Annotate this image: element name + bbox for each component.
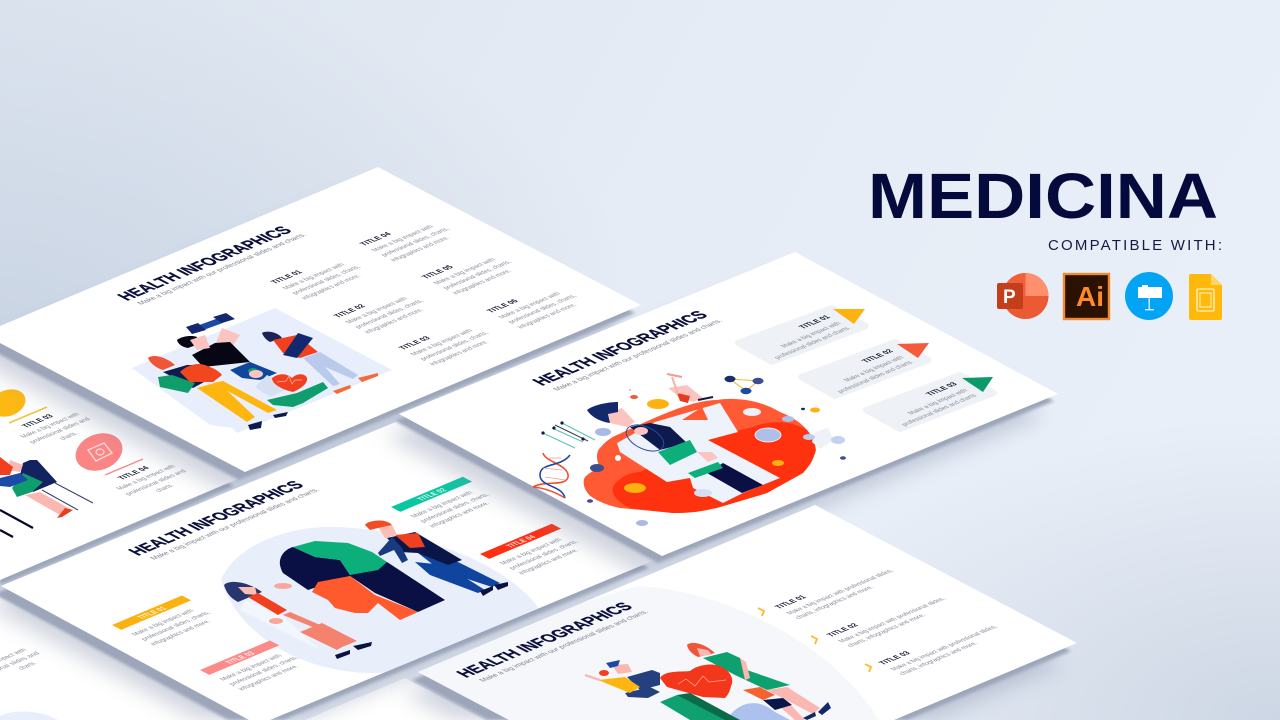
title 02 block <box>391 477 505 529</box>
title 02 block <box>331 287 435 335</box>
title 05 block <box>419 248 523 296</box>
title 03 block: professional slides, charts, <box>418 330 491 362</box>
subheading: Make a big impact with our professional slides and charts. <box>552 319 725 392</box>
icon: PowerPoint: P <box>1003 287 1016 308</box>
title 03 block: infographics and more. <box>237 664 301 692</box>
icon: chevron 01 <box>758 608 764 616</box>
title 02 block: TITLE 02 <box>331 303 368 319</box>
title 01 block: infographics and more. <box>300 273 363 301</box>
illustration: head puzzle <box>221 520 540 673</box>
title 01 block: professional slides, charts, <box>140 610 213 642</box>
title 04 block: Make a big impact with <box>115 464 178 491</box>
divider: yellow <box>9 407 47 423</box>
title 04 block <box>480 524 594 576</box>
title 03 block <box>6 405 103 450</box>
title 04 block: professional slides and <box>124 469 189 497</box>
callout 01: professional slides and charts. <box>773 326 853 360</box>
title 02 block: Make a big impact with <box>409 490 475 519</box>
panel: puzzle slide <box>0 421 655 720</box>
title 02 block: TITLE 02 <box>415 487 449 502</box>
title 01 block <box>112 596 224 647</box>
title 01 block: TITLE 01 <box>772 594 809 610</box>
panel: left slide <box>0 352 240 595</box>
subheading: Make a big impact with our professional slides and charts. <box>136 233 309 306</box>
title 04 block: Make a big impact with <box>498 537 564 566</box>
title 01 block: infographics and more. <box>149 619 213 647</box>
divider: pink <box>105 459 143 475</box>
compatible with label: COMPATIBLE WITH: <box>1048 237 1222 254</box>
title 04 block: TITLE 04 <box>504 533 539 549</box>
title 02 block: infographics and more. <box>428 501 492 529</box>
callout 03: TITLE 03 <box>923 381 960 397</box>
title 02 block: Make a big impact with <box>344 296 410 325</box>
icon: chevron 02 <box>811 636 817 644</box>
title 03 block: infographics and more. <box>428 339 491 367</box>
callout 01 <box>738 308 866 362</box>
icon: yellow circle <box>0 385 29 421</box>
icon: molecule <box>724 376 764 394</box>
title 03 block: professional slides, charts, <box>228 655 301 687</box>
title 03 block <box>396 319 500 367</box>
title 04 block <box>357 215 461 263</box>
title 01 block <box>268 253 372 301</box>
panel: family slide <box>400 505 1077 720</box>
icon: DNA helix <box>533 453 570 498</box>
title 03 block <box>200 641 312 692</box>
title 02 block: professional slides, charts, <box>353 298 426 330</box>
decorative circle <box>0 711 58 720</box>
callout 02: TITLE 02 <box>859 348 896 364</box>
title 01 block: TITLE 01 <box>268 269 305 285</box>
title 06 block: Make a big impact with <box>497 291 563 320</box>
icon: chevron 03 <box>865 664 871 672</box>
text block: bottom-left slide: charts. <box>17 661 39 671</box>
illustration: seated person <box>0 457 93 537</box>
panel: bottom-left slide <box>0 597 234 720</box>
title 01 block <box>772 562 905 620</box>
callout 02 <box>801 342 929 396</box>
icon: pink circle <box>70 427 128 477</box>
title 02 block: charts, infographics and more. <box>846 613 928 648</box>
title 03 block: TITLE 03 <box>19 413 56 429</box>
callout 02: professional slides and charts. <box>836 360 916 394</box>
subheading: Make a big impact with our professional slides and charts. <box>478 610 651 683</box>
title 05 block: professional slides, charts, <box>441 259 514 291</box>
title 05 block: infographics and more. <box>451 268 514 296</box>
title 03 block: TITLE 03 <box>876 650 913 666</box>
title 03 block: charts. <box>58 431 80 441</box>
title 01 block: Make a big impact with <box>130 608 196 637</box>
title 06 block: infographics and more. <box>516 302 579 330</box>
title 04 block: infographics and more. <box>389 235 452 263</box>
heading: HEALTH INFOGRAPHICS <box>452 600 638 680</box>
illustration: fitness group <box>132 308 392 433</box>
callout 02: Make a big impact with <box>842 355 906 383</box>
title 02 block: infographics and more. <box>363 307 426 335</box>
panel: top slide <box>0 167 641 494</box>
heading: HEALTH INFOGRAPHICS <box>124 479 309 558</box>
title 04 block: infographics and more. <box>517 548 581 576</box>
panel: bottom-centre slide <box>305 678 485 720</box>
icon: Illustrator <box>1064 274 1109 319</box>
title 04 block: TITLE 04 <box>357 230 394 247</box>
title 04 block: charts. <box>154 483 176 493</box>
title 04 block <box>102 457 199 502</box>
callout 01: Make a big impact with <box>779 321 843 349</box>
heading: HEALTH INFOGRAPHICS <box>528 309 713 388</box>
title 04 block: professional slides, charts, <box>379 226 452 258</box>
title 03 block <box>876 618 1009 676</box>
icon: Keynote <box>1125 272 1173 320</box>
title 04 block: Make a big impact with <box>370 224 436 253</box>
title 03 block: Make a big impact with <box>409 328 475 357</box>
title 02 block: TITLE 02 <box>824 622 861 638</box>
icon: PowerPoint <box>997 273 1048 319</box>
title 04 block: professional slides, charts, <box>508 539 581 571</box>
title 02 block <box>824 590 957 648</box>
callout 03: Make a big impact with <box>906 388 970 416</box>
title 01 block: Make a big impact with <box>281 262 347 291</box>
title 03 block: Make a big impact with <box>19 412 82 439</box>
title 04 block: TITLE 04 <box>115 464 152 481</box>
title 01 block: charts, infographics and more. <box>794 585 876 620</box>
illustration: family with heart <box>585 643 831 720</box>
title 03 block: Make a big impact with professional slides, <box>889 624 1000 672</box>
panel: doctor slide <box>385 252 1058 578</box>
title 06 block <box>484 282 588 330</box>
title 05 block: Make a big impact with <box>432 257 498 286</box>
icon: Illustrator: Ai <box>1076 281 1104 312</box>
title 06 block: TITLE 06 <box>484 298 521 314</box>
title 05 block: TITLE 05 <box>419 264 456 280</box>
title 06 block: professional slides, charts, <box>506 293 579 325</box>
title 03 block: TITLE 03 <box>396 335 433 351</box>
icon: Google Slides <box>1189 274 1222 320</box>
title 03 block: professional slides and <box>28 417 93 445</box>
title 01 block: TITLE 01 <box>135 605 169 621</box>
large circle backdrop <box>400 586 879 720</box>
heading: HEALTH INFOGRAPHICS <box>113 224 297 303</box>
title 02 block: Make a big impact with professional slides, <box>837 596 948 644</box>
title 03 block: charts, infographics and more. <box>898 641 980 676</box>
title 01 block: Make a big impact with professional slides, <box>785 568 896 616</box>
title 03 block: Make a big impact with <box>218 653 284 682</box>
subheading: Make a big impact with our professional slides and charts. <box>149 488 322 561</box>
title: MEDICINA <box>868 160 1218 232</box>
title 02 block: professional slides, charts, <box>419 492 492 524</box>
illustration: doctor <box>584 374 846 526</box>
callout 03: professional slides and charts. <box>900 393 980 427</box>
callout 01: TITLE 01 <box>796 314 833 330</box>
callout 03 <box>866 375 994 429</box>
title 03 block: TITLE 03 <box>223 650 257 666</box>
title 01 block: professional slides, charts, <box>290 264 363 296</box>
text block: bottom-left slide <box>0 646 51 686</box>
icon: rods <box>541 421 595 448</box>
